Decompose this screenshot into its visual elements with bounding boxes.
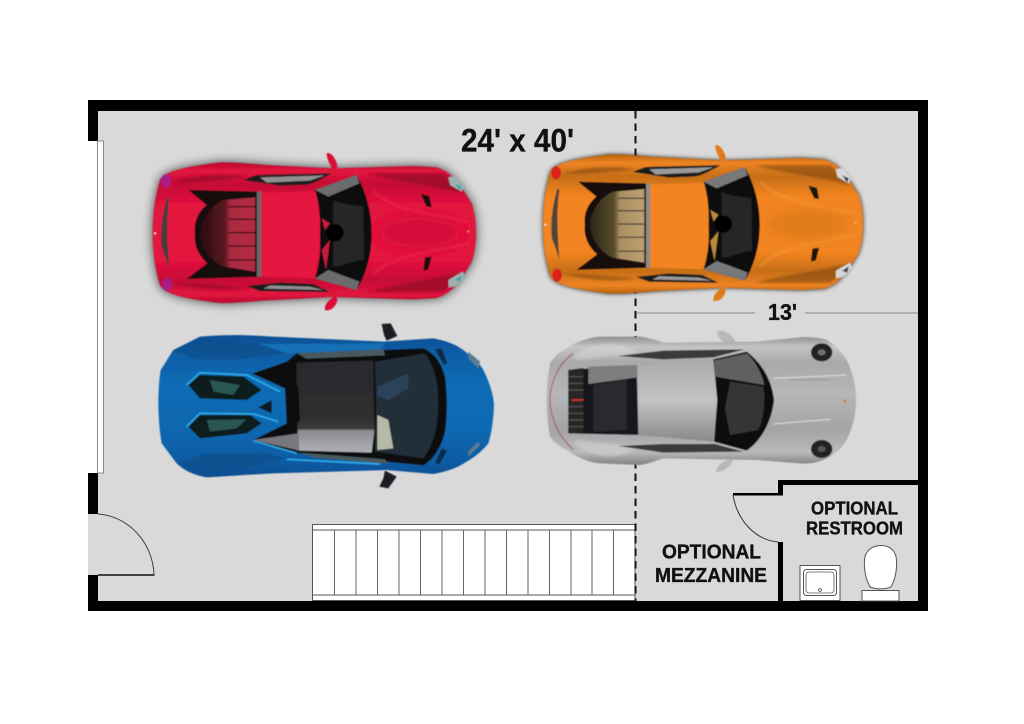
hood vents xyxy=(421,194,432,271)
label: optional restroom xyxy=(806,498,903,538)
body xyxy=(153,162,476,303)
window opening in left wall xyxy=(86,141,104,473)
canopy xyxy=(252,348,447,465)
label: optional restroom: RESTROOM xyxy=(806,518,903,538)
heading: building size: 24' x 40' xyxy=(461,122,574,158)
car: red Ferrari xyxy=(153,153,476,310)
rear light strip xyxy=(550,353,573,450)
label: optional mezzanine: MEZZANINE xyxy=(655,565,767,587)
nose vents xyxy=(435,348,447,464)
body xyxy=(543,154,863,294)
shading xyxy=(562,165,850,283)
side windows xyxy=(243,173,332,292)
entry door xyxy=(86,514,154,575)
headlights xyxy=(836,168,852,278)
mirrors xyxy=(713,145,726,301)
roof xyxy=(297,361,374,453)
rear deck xyxy=(187,190,262,279)
rear window detail xyxy=(551,188,559,259)
body xyxy=(547,337,856,465)
label: optional mezzanine xyxy=(655,542,767,587)
engine vents xyxy=(188,375,262,438)
mirrors xyxy=(716,331,736,472)
dimension: 13 feet: 13' xyxy=(768,299,797,325)
car: orange Ferrari xyxy=(543,145,863,301)
label: optional restroom: OPTIONAL xyxy=(811,498,898,518)
mezzanine dashed line xyxy=(634,111,636,601)
restroom walls xyxy=(733,480,919,602)
tail lights xyxy=(551,166,561,179)
floor plan shell xyxy=(86,100,928,611)
outer walls xyxy=(88,100,928,611)
rear deck xyxy=(577,182,651,270)
side windows xyxy=(618,349,745,453)
label: optional mezzanine: OPTIONAL xyxy=(662,542,761,564)
rear grille xyxy=(568,368,583,433)
roof xyxy=(638,358,717,442)
rear deck xyxy=(568,365,638,435)
windshield xyxy=(704,167,760,281)
icon: toilet xyxy=(862,546,899,601)
car: silver Porsche xyxy=(547,331,856,472)
body creases xyxy=(573,344,637,456)
windshield xyxy=(713,352,774,451)
windshield xyxy=(315,175,372,290)
garage floor xyxy=(98,111,918,601)
headlights xyxy=(448,176,465,287)
hood vents xyxy=(808,186,819,262)
tail lights xyxy=(161,174,171,188)
body xyxy=(158,335,494,477)
staircase xyxy=(312,524,635,600)
mirrors xyxy=(325,153,337,310)
roof xyxy=(261,191,321,278)
headlights xyxy=(811,343,832,361)
side windows xyxy=(633,165,720,283)
restroom door swing xyxy=(733,495,778,542)
car: blue Lamborghini xyxy=(158,323,494,488)
mirrors xyxy=(379,323,397,488)
windshield xyxy=(375,353,438,458)
roof xyxy=(650,183,709,269)
side glass xyxy=(297,349,388,464)
rear window detail xyxy=(161,197,169,268)
icon: sink xyxy=(800,566,840,600)
body panels xyxy=(173,338,287,474)
shading xyxy=(172,173,463,292)
